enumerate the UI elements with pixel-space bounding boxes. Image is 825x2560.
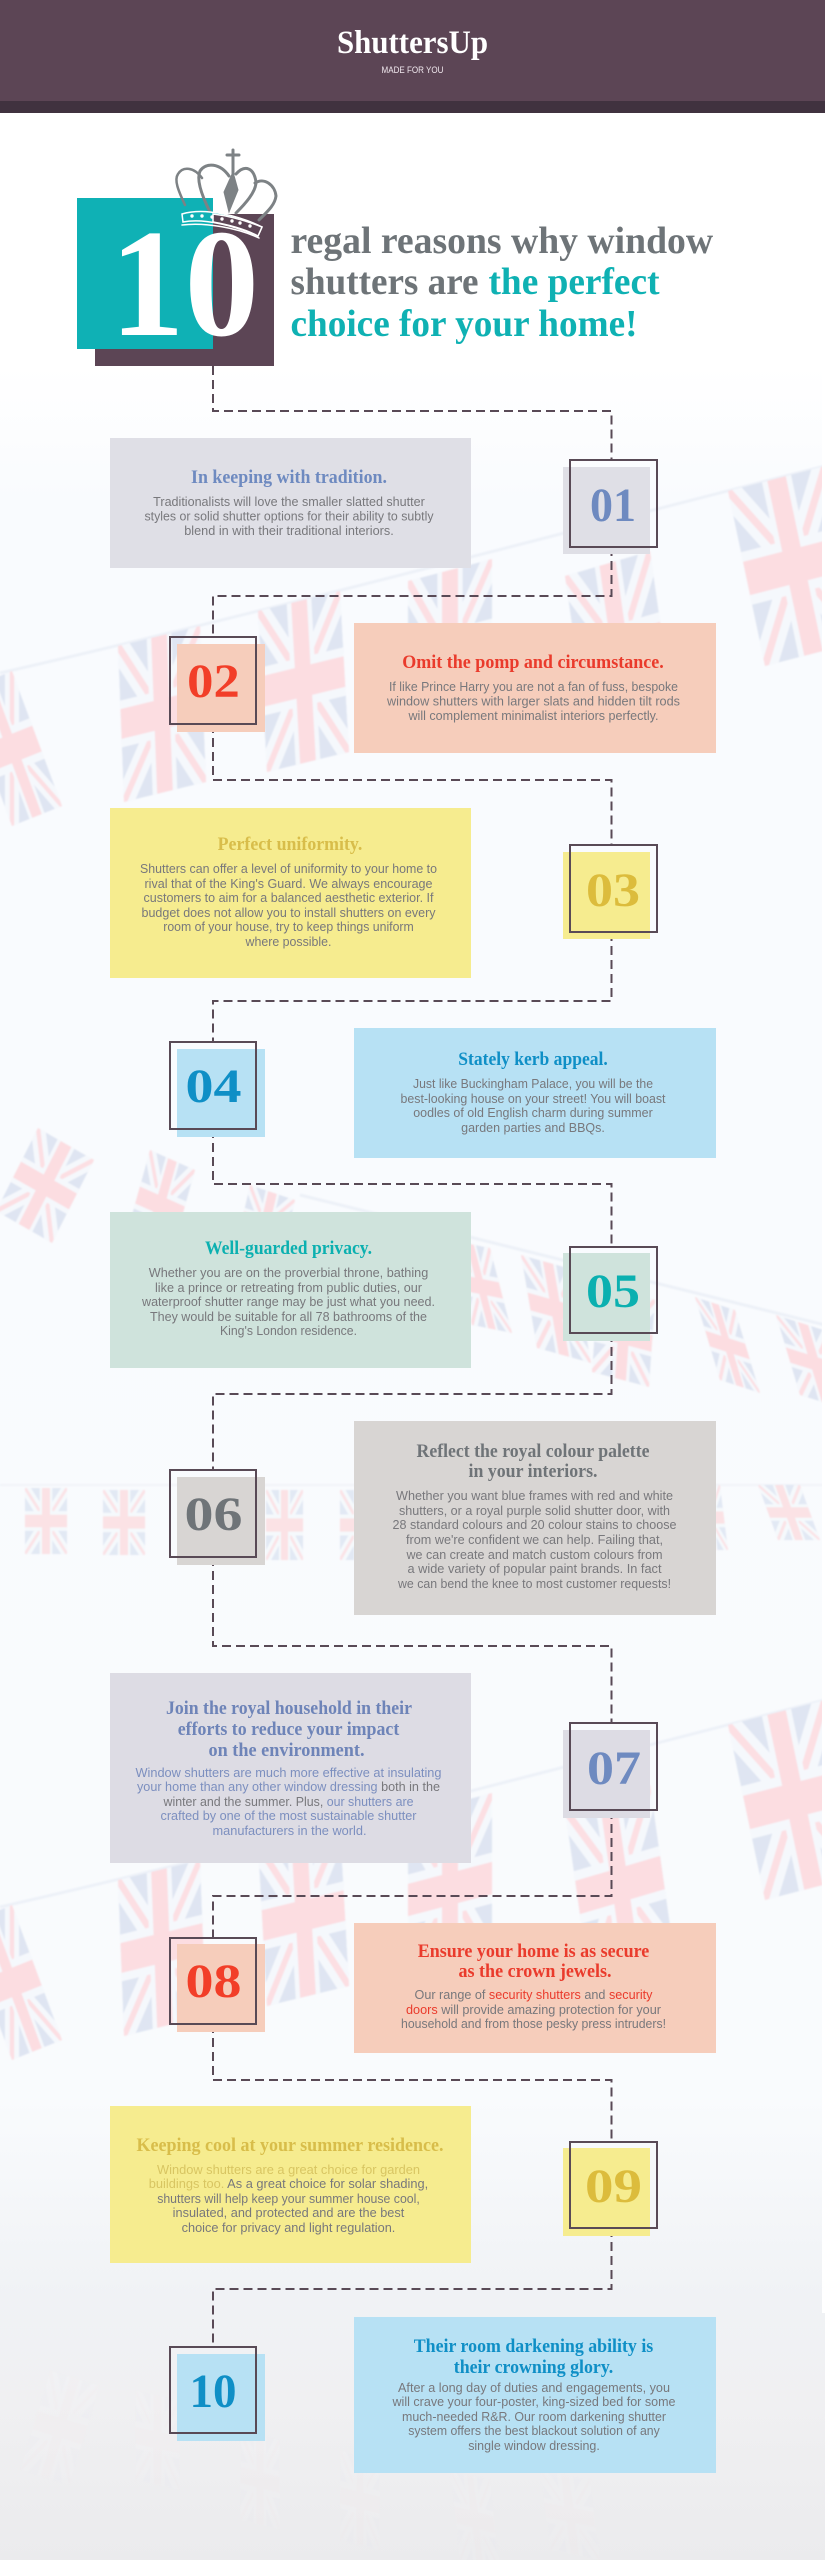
body 9: buildings too. As a great choice for solar shading, bbox=[149, 2177, 428, 2191]
number badge 01: 01 bbox=[590, 479, 636, 532]
body 7: crafted by one of the most sustainable shutter bbox=[160, 1809, 416, 1823]
body 6: shutters, or a royal purple solid shutter door, with bbox=[399, 1504, 670, 1518]
title bbox=[290, 220, 714, 345]
heading 8: Ensure your home is as secure bbox=[418, 1942, 649, 1962]
body 6: from we're confident we can help. Failing that, bbox=[406, 1533, 663, 1547]
heading 10: their crowning glory. bbox=[454, 2358, 613, 2378]
tagline: MADE FOR YOU bbox=[382, 65, 444, 75]
body 8: Our range of security shutters and security bbox=[414, 1988, 653, 2002]
panel: reason 4 bbox=[354, 1028, 716, 1158]
body 3 bbox=[140, 862, 437, 949]
heading 6 bbox=[416, 1442, 650, 1482]
body 6 bbox=[392, 1489, 677, 1591]
body 10: will crave your four-poster, king-sized bed for some bbox=[391, 2395, 676, 2409]
number badge 02 bbox=[170, 637, 265, 732]
body 4: Just like Buckingham Palace, you will be the bbox=[413, 1077, 653, 1091]
body 3: Shutters can offer a level of uniformity to your home to bbox=[140, 862, 437, 876]
number badge 06 bbox=[170, 1470, 265, 1565]
body 7: manufacturers in the world. bbox=[212, 1824, 366, 1838]
panel: reason 7 bbox=[110, 1673, 471, 1863]
body 5: They would be suitable for all 78 bathrooms of the bbox=[150, 1310, 427, 1324]
panel: reason 6 bbox=[354, 1421, 716, 1615]
body 10: single window dressing. bbox=[468, 2439, 600, 2453]
body 9: insulated, and protected and are the best bbox=[173, 2206, 405, 2220]
heading 10 bbox=[414, 2337, 653, 2378]
number badge 06: 06 bbox=[184, 1488, 242, 1541]
heading 3: Perfect uniformity. bbox=[218, 835, 362, 855]
heading 7: Join the royal household in their bbox=[166, 1699, 412, 1719]
heading 2: Omit the pomp and circumstance. bbox=[402, 653, 664, 673]
number badge 09: 09 bbox=[585, 2160, 642, 2213]
body 7: your home than any other window dressing both in the bbox=[137, 1780, 440, 1794]
number badge 07 bbox=[563, 1723, 657, 1818]
title: the perfect bbox=[488, 261, 660, 303]
big number 10: 10 bbox=[110, 199, 259, 369]
number badge 09 bbox=[563, 2142, 657, 2236]
body 4: garden parties and BBQs. bbox=[461, 1121, 605, 1135]
number badge 04 bbox=[170, 1042, 265, 1137]
body 6: 28 standard colours and 20 colour stains to choose bbox=[392, 1518, 677, 1532]
number badge 01 bbox=[563, 460, 657, 554]
body 4 bbox=[400, 1077, 666, 1135]
body 1: styles or solid shutter options for their ability to subtly bbox=[144, 510, 434, 524]
heading 7: efforts to reduce your impact bbox=[178, 1720, 400, 1740]
body 10 bbox=[391, 2381, 676, 2453]
body 10: After a long day of duties and engagements, you bbox=[398, 2381, 670, 2395]
body 1: Traditionalists will love the smaller slatted shutter bbox=[153, 495, 425, 509]
heading 9: Keeping cool at your summer residence. bbox=[136, 2136, 444, 2156]
body 7: Window shutters are much more effective at insulating bbox=[136, 1766, 442, 1780]
dashed connector path bbox=[213, 366, 612, 2347]
heading 6: Reflect the royal colour palette bbox=[416, 1442, 650, 1462]
body 6: we can bend the knee to most customer requests! bbox=[397, 1577, 671, 1591]
number badge 10: 10 bbox=[190, 2365, 236, 2418]
body 2: will complement minimalist interiors perfectly. bbox=[407, 709, 658, 723]
number badge 07: 07 bbox=[587, 1742, 641, 1795]
number badge 10 bbox=[170, 2347, 265, 2441]
panel: reason 5 bbox=[110, 1212, 471, 1368]
heading 1: In keeping with tradition. bbox=[191, 468, 387, 488]
number badge 04: 04 bbox=[186, 1060, 242, 1113]
body 1: blend in with their traditional interiors. bbox=[184, 524, 394, 538]
body 6: Whether you want blue frames with red and white bbox=[396, 1489, 673, 1503]
panel: reason 2 bbox=[354, 623, 716, 753]
body 3: customers to aim for a balanced aesthetic exterior. If bbox=[144, 891, 434, 905]
body 2 bbox=[386, 680, 680, 723]
body 5 bbox=[141, 1266, 435, 1338]
heading 6: in your interiors. bbox=[468, 1462, 598, 1482]
number badge 05: 05 bbox=[586, 1265, 640, 1318]
panel: reason 10 bbox=[354, 2317, 716, 2473]
body 8: household and from those pesky press intruders! bbox=[401, 2017, 666, 2031]
title: shutters are bbox=[290, 261, 478, 303]
logo: ShuttersUp bbox=[337, 25, 488, 61]
body 5: King's London residence. bbox=[220, 1324, 357, 1338]
heading 4: Stately kerb appeal. bbox=[458, 1050, 608, 1070]
number badge 08: 08 bbox=[186, 1955, 242, 2008]
heading 8: as the crown jewels. bbox=[458, 1962, 612, 1982]
heading 10: Their room darkening ability is bbox=[414, 2337, 653, 2357]
title: regal reasons why window bbox=[290, 220, 714, 262]
number badge 05 bbox=[563, 1247, 657, 1341]
body 9: Window shutters are a great choice for garden bbox=[157, 2163, 420, 2177]
heading 7: on the environment. bbox=[208, 1741, 364, 1761]
body 9: choice for privacy and light regulation. bbox=[182, 2221, 395, 2235]
title: choice for your home! bbox=[290, 303, 638, 345]
header bar bbox=[0, 0, 825, 113]
number badge 03 bbox=[563, 845, 657, 939]
body 8: doors will provide amazing protection for your bbox=[406, 2003, 661, 2017]
body 10: much-needed R&R. Our room darkening shutter bbox=[402, 2410, 666, 2424]
background right edge bbox=[822, 113, 825, 2313]
body 10: system offers the best blackout solution of any bbox=[408, 2424, 661, 2438]
body 8 bbox=[401, 1988, 666, 2031]
body 3: room of your house, try to keep things uniform bbox=[163, 920, 414, 934]
body 9: shutters will help keep your summer house cool, bbox=[157, 2192, 420, 2206]
body 7: winter and the summer. Plus, our shutters are bbox=[163, 1795, 414, 1809]
body 6: we can create and match custom colours from bbox=[405, 1548, 662, 1562]
body 5: waterproof shutter range may be just what you need. bbox=[141, 1295, 435, 1309]
body 4: oodles of old English charm during summer bbox=[413, 1106, 653, 1120]
number badge 03: 03 bbox=[586, 864, 640, 917]
number badge 08 bbox=[170, 1938, 265, 2032]
panel: reason 3 bbox=[110, 808, 471, 978]
panel: reason 1 bbox=[110, 438, 471, 568]
body 6: a wide variety of popular paint brands. In fact bbox=[408, 1562, 662, 1576]
number badge 02: 02 bbox=[187, 655, 240, 708]
panel: reason 9 bbox=[110, 2106, 471, 2263]
title badge: number 10 with crown bbox=[77, 150, 276, 369]
body 2: window shutters with larger slats and hidden tilt rods bbox=[386, 694, 680, 708]
body 3: budget does not allow you to install shutters on every bbox=[142, 906, 436, 920]
body 3: rival that of the King's Guard. We always encourage bbox=[144, 877, 433, 891]
panel: reason 8 bbox=[354, 1923, 716, 2053]
body 2: If like Prince Harry you are not a fan of fuss, bespoke bbox=[389, 680, 678, 694]
body 1 bbox=[144, 495, 434, 538]
body 9 bbox=[149, 2163, 428, 2235]
heading 7 bbox=[166, 1699, 412, 1761]
heading 5: Well-guarded privacy. bbox=[205, 1239, 372, 1259]
heading 8 bbox=[418, 1942, 649, 1982]
body 4: best-looking house on your street! You will boast bbox=[400, 1092, 666, 1106]
body 5: like a prince or retreating from public duties, our bbox=[155, 1281, 422, 1295]
body 5: Whether you are on the proverbial throne, bathing bbox=[149, 1266, 428, 1280]
body 3: where possible. bbox=[245, 935, 332, 949]
body 7 bbox=[136, 1766, 442, 1838]
icon: crown bbox=[176, 150, 276, 238]
